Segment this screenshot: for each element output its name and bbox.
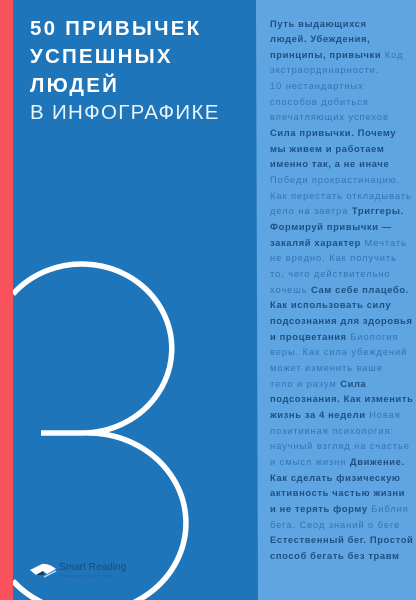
text block: list of book titles: способ бегать без травм xyxy=(270,550,400,561)
text block: list of book titles: Формируй привычки — xyxy=(270,221,392,232)
text block: list of book titles: хочешь Сам себе плацебо. xyxy=(270,284,409,295)
text block: list of book titles xyxy=(270,18,414,561)
text block: list of book titles: закаляй характер Мечтать xyxy=(270,237,407,248)
text block: list of book titles: позитивная психология: xyxy=(270,425,394,436)
text block: list of book titles: то, чего действительно xyxy=(270,268,390,279)
text block: list of book titles: Победи прокрастинацию. xyxy=(270,174,400,185)
text block: list of book titles: и смысл жизни Движение. xyxy=(270,456,405,467)
text block: list of book titles: жизнь за 4 недели Новая xyxy=(270,409,401,420)
text block: list of book titles: людей. Убеждения, xyxy=(270,33,370,44)
logo wordmark: Smart Reading: Smart Reading xyxy=(59,562,126,573)
text block: list of book titles: и процветания Биология xyxy=(270,331,398,342)
text block: list of book titles: дело на завтра Триггеры. xyxy=(270,205,404,216)
title: В ИНФОГРАФИКЕ xyxy=(30,101,220,124)
text block: list of book titles: не вредно. Как получить xyxy=(270,252,397,263)
text block: list of book titles: Как перестать откладывать xyxy=(270,190,412,201)
text block: list of book titles: 10 нестандартных xyxy=(270,80,364,91)
text block: list of book titles: Сила привычки. Почему xyxy=(270,127,396,138)
text block: list of book titles: научный взгляд на счастье xyxy=(270,440,410,451)
text block: list of book titles: способов добиться xyxy=(270,96,369,107)
text block: list of book titles: активность частью жизни xyxy=(270,487,405,498)
text block: list of book titles: и не терять форму Библия xyxy=(270,503,409,514)
panel: light blue text column xyxy=(256,0,416,600)
text block: list of book titles: Как использовать силу xyxy=(270,299,391,310)
text block: list of book titles: мы живем и работаем xyxy=(270,143,384,154)
text block: list of book titles: тело и разум Сила xyxy=(270,378,366,389)
icon: Smart Reading book logo xyxy=(30,564,56,578)
panel: red spine strip xyxy=(0,0,13,600)
text block: list of book titles: бега. Свод знаний о беге xyxy=(270,518,400,530)
logo wordmark: Smart Reading: Главные идеи книг за 20 минут xyxy=(59,574,112,578)
text block: list of book titles: принципы, привычки Код xyxy=(270,49,403,60)
title: ЛЮДЕЙ xyxy=(30,74,119,97)
text block: list of book titles: веры. Как сила убеждений xyxy=(270,346,407,357)
logo wordmark: Smart Reading xyxy=(59,562,126,578)
text block: list of book titles: впечатляющих успехов xyxy=(270,111,389,122)
title: 50 ПРИВЫЧЕК xyxy=(30,17,201,40)
text block: list of book titles: экстраординарности. xyxy=(270,64,379,75)
panel: blue cover background xyxy=(13,0,258,600)
icon: large numeral three xyxy=(13,261,189,600)
title: УСПЕШНЫХ xyxy=(30,45,173,68)
text block: list of book titles: Путь выдающихся xyxy=(270,18,367,28)
title xyxy=(30,17,220,124)
text block: list of book titles: может изменить ваше xyxy=(270,362,383,373)
text block: list of book titles: подсознания для здоровья xyxy=(270,315,413,326)
text block: list of book titles: Естественный бег. Простой xyxy=(270,534,413,545)
text block: list of book titles: именно так, а не иначе xyxy=(270,158,389,169)
text block: list of book titles: Как сделать физическую xyxy=(270,472,401,483)
text block: list of book titles: подсознания. Как изменить xyxy=(270,393,414,404)
